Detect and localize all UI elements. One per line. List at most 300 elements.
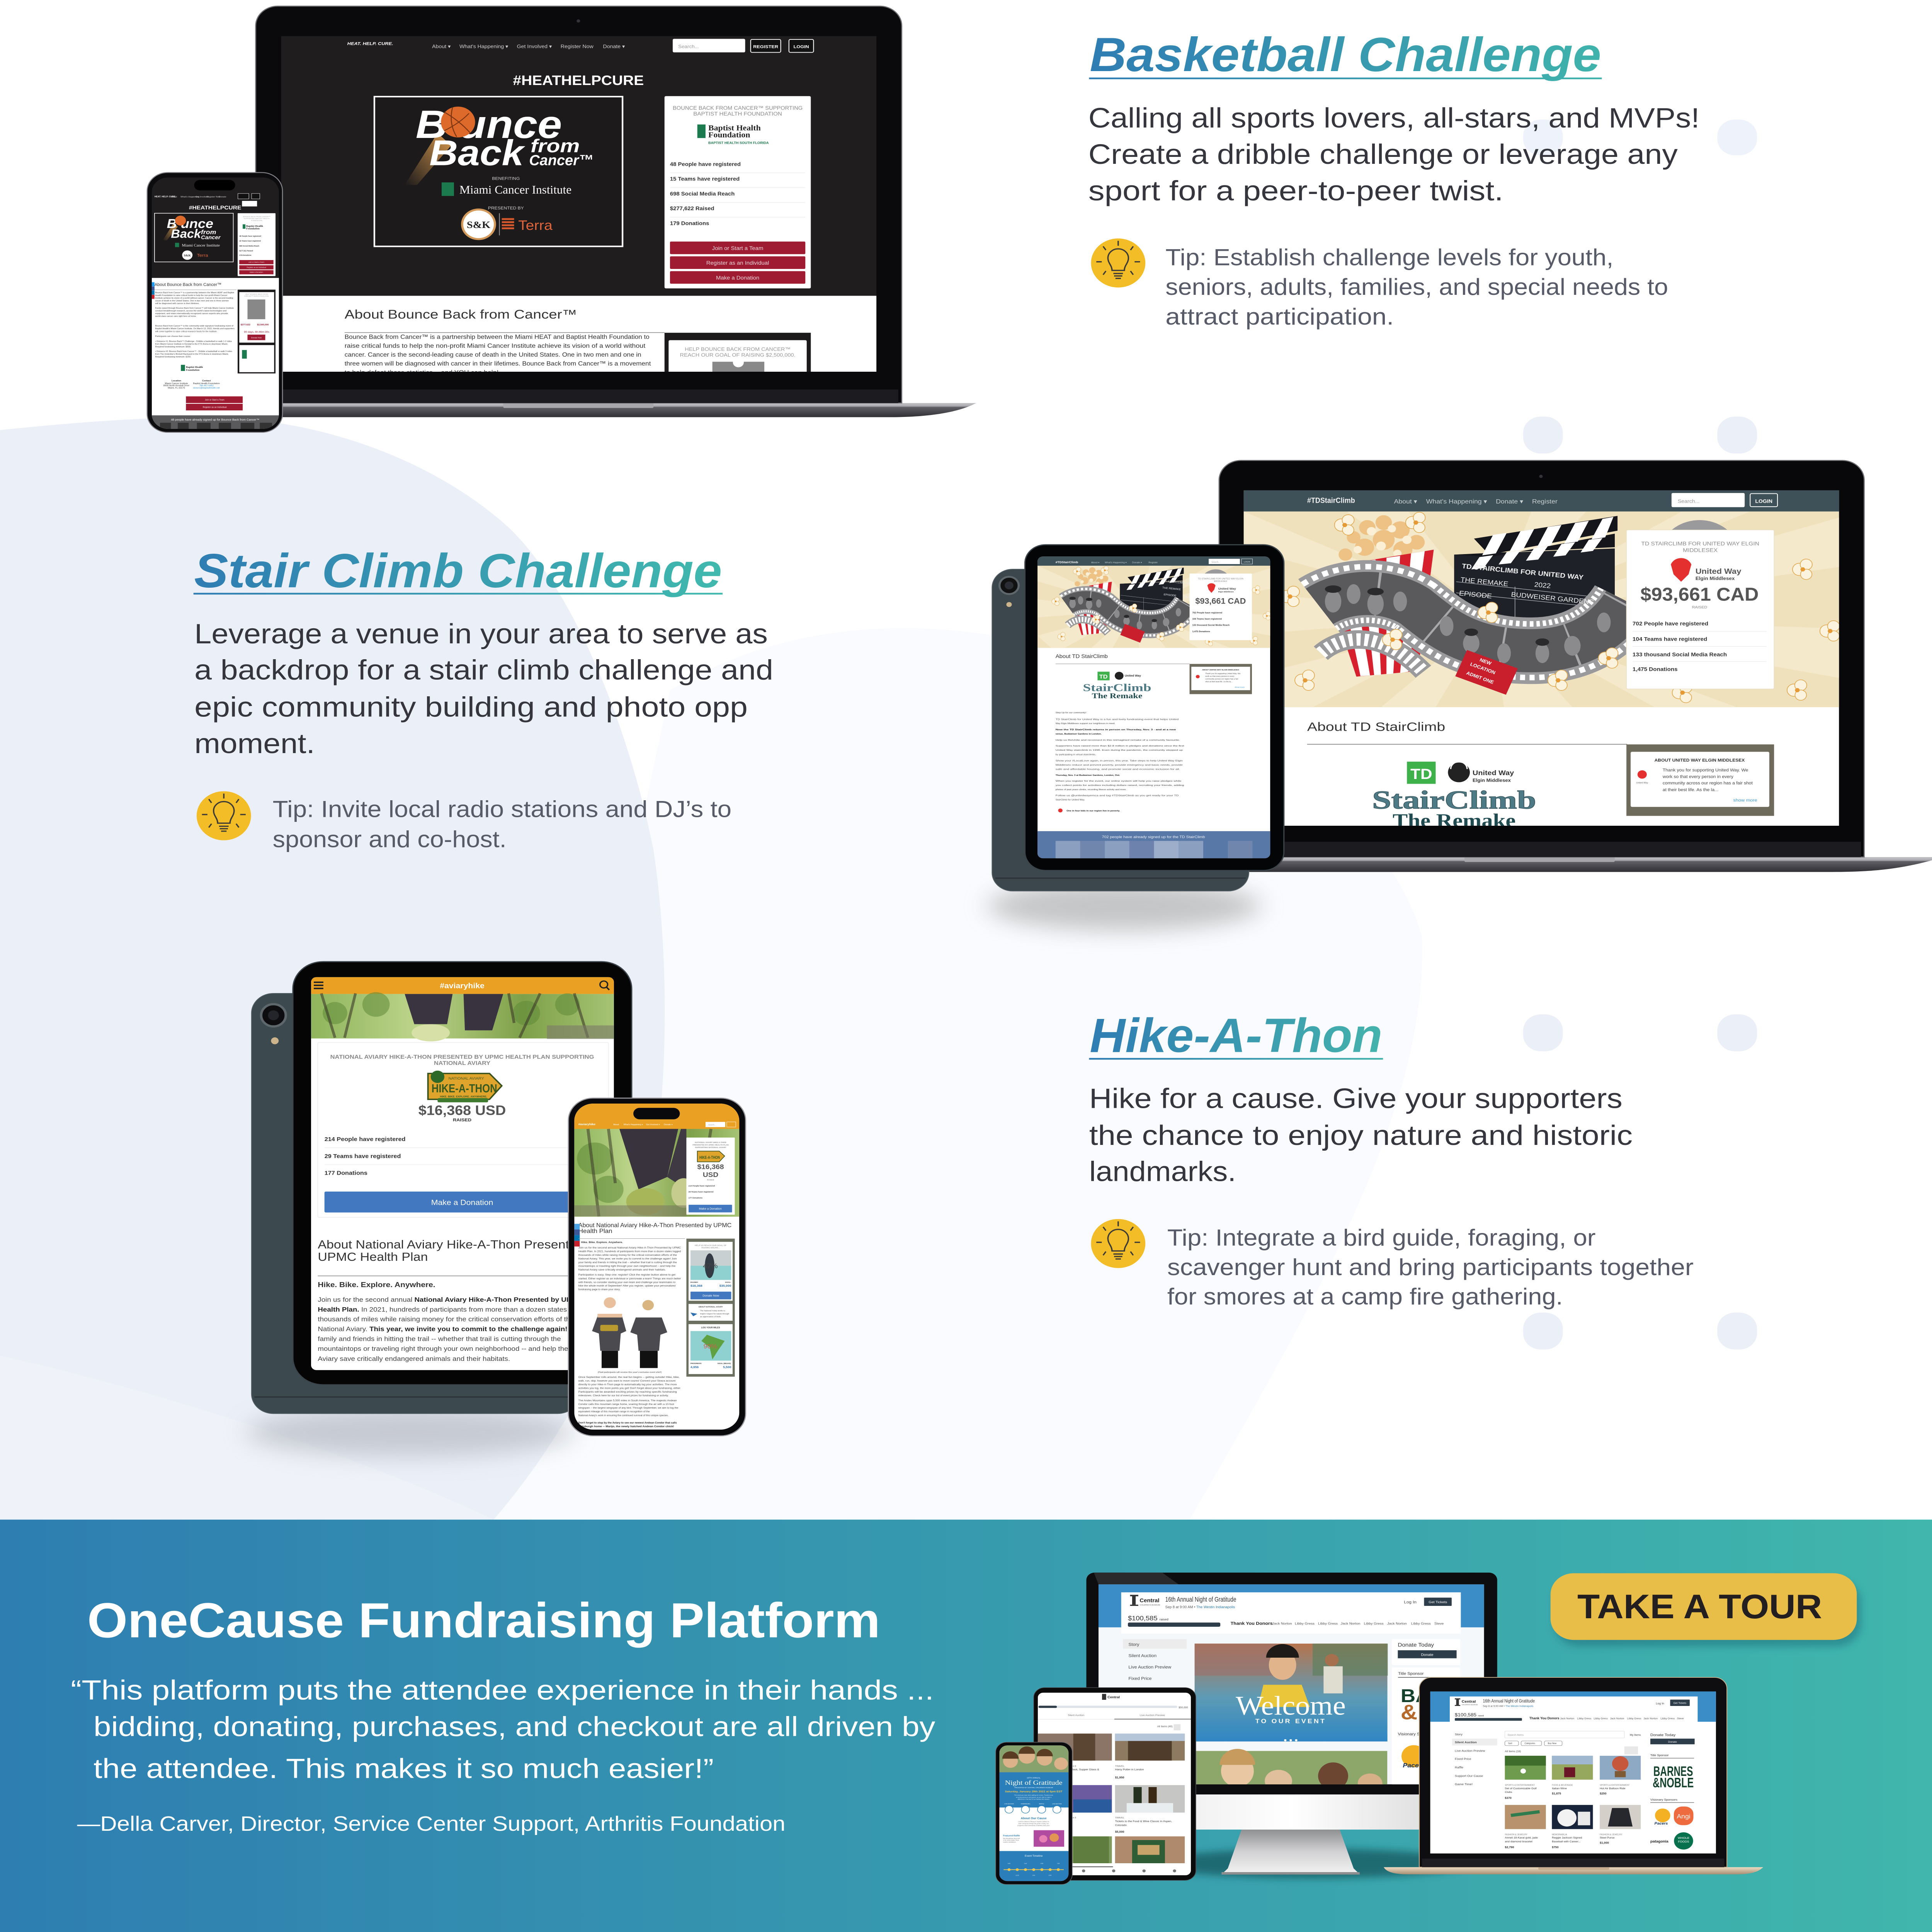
laptop lid (1419, 1677, 1727, 1867)
tablet auction grid: TRAVEL (1115, 1817, 1125, 1819)
laptop screen: $100,585 raised (1455, 1712, 1484, 1718)
phone screen: 3:00 (1032, 1875, 1035, 1876)
site navigation: Register (1532, 498, 1558, 505)
phone screen: from Miami Cancer Institute in Kendall to the FTX Arena in downtown Miami. (155, 343, 228, 345)
bounce back logo panel: PRESENTED BY (488, 206, 524, 211)
donation progress card: 15 Teams have registered (670, 176, 740, 182)
auction item grid: FASHION & JEWELRY (1505, 1834, 1527, 1836)
laptop screen: Libby Gress (1577, 1718, 1592, 1720)
tablet body copy: Supporters have raised more than $2.8 million in pledges and donations since the first (1056, 745, 1184, 747)
phone body copy: Participants will be awarded exciting prizes by reaching specific fundraising (578, 1391, 677, 1393)
auction item grid: SPORTS & ENTERTAINMENT (1600, 1784, 1630, 1787)
phone screen: Join or Start a Team (248, 261, 264, 263)
phone right column: RAISED: (690, 1281, 699, 1283)
phone screen: Miami Cancer Institute (165, 383, 188, 385)
phone screen: Baptist Health Foundation (193, 383, 220, 385)
text block: basketball description: Calling all sports lovers, all-stars, and MVPs! (1088, 102, 1699, 134)
button: take a tour (1551, 1573, 1861, 1646)
about section: Health Plan. In 2021, hundreds of participants from more than a dozen states logged (318, 1306, 591, 1313)
about section: The Remake (1393, 810, 1516, 832)
device mockup: basketball phone (147, 173, 282, 432)
tablet body copy: One in four kids in our region live in poverty. (1066, 810, 1120, 812)
welcome hero photo (1195, 1644, 1388, 1742)
sponsor column: Donate Today (1650, 1733, 1676, 1737)
site navigation: #TDStairClimb (1307, 497, 1355, 505)
tablet screen: 133 thousand Social Media Reach (1192, 624, 1230, 627)
tablet screen: show more (1235, 686, 1245, 689)
tablet auction grid: Colorado (1115, 1824, 1127, 1827)
site navigation: LOGIN (793, 44, 809, 49)
donation progress card: RAISED (1692, 605, 1707, 609)
phone screen: vacation destinations. (1003, 1842, 1016, 1843)
phone right column: 4,956 (690, 1366, 699, 1369)
tablet screen: United Way (1218, 587, 1236, 590)
auction item grid: Reggie Jackson Signed (1552, 1837, 1582, 1839)
bounce back logo panel (374, 97, 622, 247)
tablet screen: Register (1148, 562, 1158, 564)
phone screen: Get Involved (196, 196, 209, 198)
tablet body copy: Way Elgin Middlesex support our neighbours in need. (1056, 722, 1116, 725)
phone screen: Back (171, 227, 202, 241)
testimonial quote: the attendee. This makes it so much easier!” (94, 1753, 714, 1784)
about section: About National Aviary Hike-A-Thon Presented by (318, 1238, 602, 1251)
phone screen: HIKE-A-THON (699, 1155, 720, 1160)
tablet body copy: Now the TD StairClimb returns in person on Thursday, Nov. 3 - and at a new (1056, 728, 1176, 731)
tablet body copy (1056, 711, 1184, 812)
phone screen: Register as an Individual (247, 267, 266, 268)
about section: work so that every person in every (1662, 775, 1733, 779)
panel: basketball challenge copy (1088, 27, 1699, 330)
tablet auction grid: Lot 8 (1071, 1765, 1076, 1767)
auction item grid: FOOD & BEVERAGE (1552, 1784, 1573, 1787)
phone right column (686, 1239, 735, 1377)
red ticket text: NEW (1479, 657, 1493, 666)
donation progress card: 48 People have registered (670, 161, 741, 167)
phone screen: Baptist Health (186, 366, 203, 369)
text block: stair climb description: moment. (194, 728, 315, 759)
phone screen: S&K (184, 254, 191, 257)
phone body copy: Participation is easy. Step one: register! Click the register button above to get (578, 1274, 675, 1276)
tablet body copy: photos of past years climbs, recording fitness activity and more. (1056, 788, 1127, 791)
tablet screen: $50,000 (1179, 1706, 1188, 1709)
sponsor column: Title Sponsor (1650, 1754, 1669, 1757)
auction item grid: and diamond bracelet (1505, 1840, 1532, 1843)
phone screen: NATIONAL AVIARY HIKE-A-THON (695, 1141, 726, 1144)
donation progress card (318, 1043, 609, 1218)
laptop screen: Log In (1656, 1702, 1664, 1705)
phone screen: cause of death in the United States. One in two men and one in three women (155, 300, 229, 302)
text block: hike description: landmarks. (1089, 1156, 1236, 1187)
tablet body copy: TD StairClimb for United Way is a fun and lively fundraising event that helps United (1056, 718, 1179, 721)
tablet screen: shot at their best life. As the la... (1205, 681, 1232, 683)
about section (345, 308, 811, 376)
phone screen: 214 People have registered (689, 1185, 715, 1187)
auction item grid: $1,000 (1600, 1841, 1609, 1845)
phone right column: $16,368 (690, 1284, 702, 1287)
sponsor column: &NOBLE (1653, 1775, 1694, 1790)
phone screen: B unce (167, 217, 213, 231)
tablet screen: The Remake (1092, 692, 1143, 700)
phone screen: What's Happening (180, 196, 199, 198)
device mockup: black tablet (1034, 1688, 1196, 1880)
phone screen: programs reach thousands of families each year. (1017, 1825, 1050, 1827)
phone screen: Participants can choose their course: (155, 335, 190, 338)
phone screen: will be diagnosed with cancer in their lifetimes. (155, 303, 199, 305)
phone body copy: Health Plan. In 2021, hundreds of participants from more than a dozen states logged (578, 1250, 681, 1253)
laptop screen: CHILDREN'S MUSEUM (1462, 1704, 1478, 1706)
monitor screen: Story (1128, 1643, 1139, 1647)
phone screen: Baptist Health (246, 225, 263, 228)
monitor screen: Get Tickets (1429, 1600, 1447, 1604)
auction item grid: Anneli 18-Karat gold, jade (1505, 1837, 1538, 1839)
tablet body copy: venue, Budweiser Gardens in London. (1056, 733, 1102, 735)
tablet screen (1037, 556, 1270, 859)
laptop screen: Libby Gress (1594, 1718, 1608, 1720)
phone screen: HELP BOUNCE BACK FROM (245, 293, 268, 295)
about section: at their best life. As the la... (1663, 788, 1718, 793)
device mockup: basketball laptop (205, 6, 976, 417)
phone body copy: hike the whole month of September! After you register, update your personalized (578, 1285, 676, 1287)
about section: Thank you for supporting United Way. We (1663, 768, 1748, 773)
phone screen: HEAT. HELP. CURE. (155, 196, 176, 198)
text block: basketball description (1088, 102, 1699, 207)
text block: stair climb description: Leverage a venue in your area to serve as (194, 619, 768, 650)
phone body copy: milestones. Check here for our list of event prizes for fundraising or activity. (578, 1395, 669, 1397)
monitor screen: Libby Gress (1411, 1622, 1431, 1625)
site navigation: About ▾ (432, 44, 451, 49)
phone screen: 6:00 (1049, 1875, 1051, 1876)
bounce back logo panel: Miami Cancer Institute (459, 183, 571, 196)
phone screen: Register as an Individual (203, 406, 226, 409)
site navigation: About ▾ (1394, 498, 1417, 505)
laptop screen: Jack Norton (1643, 1718, 1658, 1720)
phone screen: Bounce Back from Cancer™ is the community-wide signature fundraising event of (155, 325, 233, 327)
site navigation: REGISTER (753, 44, 778, 49)
device mockup: stair climb laptop (1176, 461, 1932, 872)
testimonial attribution: —Della Carver, Director, Service Center Support, Arthritis Foundation (77, 1812, 786, 1835)
phone screen: FUNDRAISING (1021, 1803, 1030, 1805)
welcome hero photo: Welcome (1236, 1691, 1346, 1721)
phone body copy: (Paid participants will receive this year's exclusive event shirt!) (598, 1371, 662, 1374)
heading: Stair Climb Challenge: Stair Climb Challenge (194, 544, 722, 597)
tablet screen: TD STAIRCLIMB FOR UNITED WAY ELGIN (1198, 578, 1243, 580)
tablet body copy: you collect points for activities including dollars raised, recruiting your friends, adding (1056, 784, 1184, 787)
phone screen: 9:00 (1008, 1863, 1010, 1864)
monitor screen: Steve (1434, 1622, 1444, 1625)
tablet body copy: Middlesex reduce and prevent poverty, provide emergency and basic needs, provide (1056, 764, 1183, 766)
phone screen: 16TH ANNUAL (1027, 1777, 1041, 1779)
tablet screen: TD (1099, 674, 1107, 680)
bounce back logo panel: from (531, 136, 580, 156)
laptop screen: Steve (1677, 1718, 1684, 1720)
monitor frame (1086, 1573, 1497, 1794)
donation progress card: 214 People have registered (325, 1136, 405, 1143)
device mockup: gold laptop (1384, 1677, 1763, 1874)
monitor screen: Jack Norton (1387, 1622, 1407, 1625)
about section: Join us for the second annual National Aviary Hike-A-Thon Presented by UPMC (318, 1296, 583, 1303)
donation progress card: Make a Donation (716, 275, 759, 281)
monitor screen: Log In (1404, 1600, 1417, 1604)
site navigation: Search... (678, 44, 699, 49)
phone screen: $16,368 (697, 1163, 724, 1170)
tablet screen: community across our region has a fair (1205, 678, 1238, 680)
about section: TD (1410, 765, 1432, 782)
sponsor column: WHOLE (1678, 1836, 1689, 1840)
laptop screen: Story (1455, 1733, 1463, 1736)
laptop screen: My Items (1630, 1734, 1641, 1736)
phone right column: GOAL (MILES): (718, 1362, 731, 1364)
auction item grid: Clubs (1505, 1791, 1512, 1794)
laptop screen: TD StairClimb page (1244, 490, 1840, 832)
tablet body copy: Follow us @unitedwayemca and tag #TDStairClimb as you get ready for your TD (1056, 794, 1179, 797)
phone body copy: National Aviary's work in ensuring the continued survival of this unique species. (578, 1414, 669, 1417)
laptop screen: Fixed Price (1455, 1757, 1471, 1761)
phone screen: Register Now (206, 196, 221, 198)
tablet screen: LOGIN (1244, 561, 1250, 563)
phone screen: Health Plan (578, 1228, 612, 1235)
laptop screen: Buy Now (1548, 1742, 1556, 1745)
phone screen: Foundation (186, 369, 199, 371)
phone screen (574, 1104, 739, 1430)
laptop screen: Categories (1525, 1742, 1535, 1745)
text block: hike description: Hike for a cause. Give your supporters (1089, 1083, 1622, 1114)
phone right column: ABOUT NATIONAL AVIARY (698, 1306, 723, 1308)
donation progress card: United Way (1696, 567, 1742, 576)
monitor screen: Visionary Sponsors (1398, 1732, 1435, 1736)
donation progress card: 1,475 Donations (1633, 667, 1678, 673)
donation progress card: Join or Start a Team (712, 245, 763, 251)
about section: About Bounce Back from Cancer™ (345, 308, 577, 321)
monitor screen: Donate Today (1398, 1642, 1434, 1648)
heading: Basketball Challenge: Basketball Challenge (1090, 27, 1601, 82)
text block: hike description (1089, 1083, 1633, 1187)
tablet screen: Thank you for supporting United Way. We (1205, 673, 1241, 675)
tablet screen: Donate ▾ (1132, 562, 1142, 564)
about section: family and friends in hitting the trail -- whether that trail is cutting through the (318, 1335, 561, 1342)
tablet screen: 702 people have already signed up for the TD StairClimb (1102, 835, 1205, 839)
laptop screen: Libby Gress (1627, 1718, 1641, 1720)
laptop screen: Sort (1508, 1742, 1512, 1745)
about section: ABOUT UNITED WAY ELGIN MIDDLESEX (1655, 759, 1745, 763)
donation progress card: 104 Teams have registered (1633, 636, 1707, 642)
tablet screen: About TD StairClimb (1056, 653, 1108, 659)
tablet screen: work so that every person in every (1205, 675, 1235, 677)
monitor screen: Jack Norton (1341, 1622, 1360, 1625)
bounce back logo panel: Cancer™ (529, 151, 594, 168)
about section: United Way (1636, 782, 1648, 784)
phone screen: Search... (708, 1124, 716, 1126)
phone body copy: directly to your Hike-A-Thon page to automatically log your activities. The more (578, 1383, 677, 1386)
phone screen: Donate Now (251, 337, 262, 338)
phone screen: 29 Teams have registered (689, 1191, 713, 1193)
phone body copy: equivalent mileage of this mountain range in recognition of the (578, 1410, 650, 1413)
sponsor column: Angi (1677, 1813, 1690, 1820)
laptop screen: Live Auction Preview (1455, 1749, 1485, 1753)
phone screen: • Distance #1: Bounce Back™ Challenge - Dribble a basketball or walk 1-2 miles (155, 340, 232, 343)
tablet body copy: Step Up for our community! (1056, 711, 1087, 714)
monitor screen: Jack Norton (1272, 1622, 1292, 1625)
phone screen: PRESENTED BY CENTRAL CHILDREN'S MUSEUM (1014, 1787, 1053, 1788)
laptop screen: Search Items (1508, 1734, 1524, 1736)
monitor screen: Title Sponsor (1398, 1672, 1424, 1676)
rear tablet (992, 569, 1249, 891)
phone screen: learn and grow through the power of play. Our (1019, 1823, 1049, 1825)
about section: REACH OUR GOAL OF RAISING $2,500,000. (680, 352, 796, 358)
phone screen: • Distance #2: Bounce Back from Cancer™ - Dribble a basketball or walk 3 miles (155, 350, 232, 353)
icon: tip lightbulb (197, 791, 251, 840)
phone screen: Central Children's Museum inspires children to (1018, 1821, 1049, 1822)
tablet auction grid: $5,000 (1115, 1830, 1124, 1833)
clapper text: THE REMAKE (1460, 576, 1509, 588)
phone screen: 179 Donations (239, 254, 252, 256)
monitor screen: Thank You Donors (1231, 1621, 1273, 1626)
phone body copy: your family and friends in hitting the trail -- whether that trail is cutting through the (578, 1261, 677, 1264)
auction item grid: $250 (1600, 1792, 1606, 1795)
site navigation: Register Now (561, 44, 594, 49)
monitor screen: Libby Gress (1318, 1622, 1338, 1625)
device mockup: hike tablet (246, 962, 632, 1457)
about section: raise critical funds to help the non-profit Miami Cancer Institute achieve its vision of a world without (345, 342, 646, 349)
welcome hero photo: TO OUR EVENT (1255, 1718, 1326, 1725)
phone screen: Hike. Bike. Explore. Anywhere. (581, 1241, 623, 1244)
site navigation: Donate ▾ (1496, 498, 1524, 505)
donation progress card: Register as an Individual (706, 260, 769, 266)
text block: hike tip: scavenger hunt and bring participants together (1167, 1254, 1694, 1280)
phone right column: HELP US REACH OUR GOAL OF (695, 1245, 726, 1247)
phone screen: RAFFLE (1039, 1803, 1044, 1805)
phone right column: Donate Now (702, 1294, 719, 1297)
laptop screen: All Items (18) (1505, 1750, 1521, 1753)
phone screen: 7:00 (1057, 1863, 1060, 1864)
phone screen: Join or Start a Team (205, 399, 224, 401)
monitor screen: Libby Gress (1364, 1622, 1384, 1625)
phone screen: 177 Donations (689, 1197, 702, 1199)
auction item grid: $2,790 (1505, 1845, 1514, 1849)
auction item grid: Set of Customizable Golf (1505, 1787, 1537, 1790)
phone body copy: with friends, so consider starting your own team and challenge your teammates to (578, 1281, 676, 1284)
bounce back logo panel: Back (429, 133, 526, 173)
donation progress card: 133 thousand Social Media Reach (1633, 652, 1727, 658)
text block: basketball tip: attract participation. (1165, 303, 1394, 330)
phone body copy: The Andes Mountains span 5,500 miles in South America. The majestic Andean (578, 1400, 677, 1402)
phone screen: $2,500,000 (257, 324, 269, 326)
phone body copy: Pittsburgh home -- Marijo, the newly hatched Andean Condor chick! (578, 1425, 674, 1428)
phone body copy: thousands of miles while raising money for the critical conservation efforts of the (578, 1254, 677, 1257)
site navigation (347, 39, 813, 53)
text block: stair climb tip: sponsor and co-host. (273, 826, 507, 852)
phone right column: 90% (704, 1343, 717, 1350)
phone screen: Terra (197, 253, 208, 258)
phone screen: will come together to raise critical research funds for the Institute. (155, 330, 217, 333)
phone body copy: National Aviary. This year, we invite you to commit to the challenge again! Join (578, 1258, 677, 1260)
text block: stair climb description: a backdrop for a stair climb challenge and (194, 655, 773, 686)
tablet screen: Silent Auction (1068, 1714, 1085, 1717)
testimonial quote: “This platform puts the attendee experience in their hands ... (71, 1675, 934, 1706)
icon: tip lightbulb (1091, 1219, 1145, 1268)
laptop screen: Jack Norton (1610, 1718, 1624, 1720)
laptop screen: Raffle (1455, 1766, 1464, 1769)
icon: tip lightbulb (1091, 238, 1145, 287)
donation progress card: $16,368 USD (418, 1102, 506, 1118)
text block: stair climb tip (273, 796, 731, 852)
phone screen: Featured Raffle (1003, 1835, 1020, 1837)
phone screen: What's Happening ▾ (624, 1124, 643, 1126)
phone screen: Required fundraising minimum: $150. (155, 356, 191, 358)
testimonial quote: bidding, donating, purchases, and checkout are all driven by (94, 1711, 935, 1742)
tablet screen: Live Auction Preview (1140, 1714, 1165, 1717)
phone screen: from The Underline's Brickell Backyard to the FTX Arena in downtown Miami. (155, 353, 229, 355)
monitor screen: $100,585 raised (1128, 1615, 1168, 1622)
tablet body copy: Help us ReUnite and reconnect in this reimagined remake of a community favourite. (1056, 739, 1180, 742)
tablet screen: TD STAIRCLIMB FOR UNITED WAY (1163, 580, 1210, 587)
sponsor column (1650, 1733, 1695, 1850)
tablet auction grid: Mask, Supper Glass & (1071, 1769, 1099, 1771)
phone screen: About (171, 196, 177, 198)
phone body copy: Condor calls this mountain range home, soaring through the air with a 10-foot (578, 1403, 674, 1406)
tablet screen: What's Happening ▾ (1105, 562, 1127, 564)
about section: mountaintops or traveling right through your own neighborhood -- and help the National (318, 1345, 597, 1352)
text block: hike description: the chance to enjoy nature and historic (1089, 1120, 1633, 1151)
laptop screen: Game Time! (1455, 1782, 1473, 1786)
laptop screen: Support Our Cause (1455, 1774, 1483, 1777)
phone screen: amazing sponsors and guests, we are able to make a (1016, 1796, 1052, 1798)
phone screen: Required fundraising minimum: $500. (155, 346, 191, 348)
bounce back logo panel: BENEFITING (492, 177, 520, 181)
testimonial quote (71, 1675, 935, 1784)
laptop screen: Thank You Donors (1529, 1716, 1560, 1720)
about section: community across our region has a fair shot (1663, 781, 1753, 786)
donation progress card: Make a Donation (431, 1199, 493, 1207)
sponsor column: Visionary Sponsors (1650, 1798, 1677, 1801)
phone right column: $35,000 (719, 1284, 731, 1287)
tablet screen: BUDWEISER GARDENS (1184, 596, 1216, 602)
about section (318, 1238, 605, 1362)
clapper text: 2022 (1534, 581, 1551, 590)
rear tablet (252, 993, 580, 1413)
laptop lid (1219, 461, 1864, 857)
donation progress card: 702 People have registered (1633, 621, 1708, 627)
phone screen: Location (172, 380, 182, 382)
phone screen: 1:00 (1024, 1863, 1027, 1864)
clapper text: EPISODE (1459, 590, 1492, 600)
text block: basketball tip: seniors, adults, families, and special needs to (1165, 274, 1668, 300)
phone screen: $277,622 (241, 324, 250, 326)
tablet screen: Central (1107, 1696, 1120, 1699)
orange top bar: #aviaryhike (440, 982, 485, 990)
phone screen (999, 1745, 1068, 1881)
text block: hike tip: for smores at a camp fire gathering. (1167, 1283, 1563, 1310)
phone screen: $277,622 Raised (239, 250, 253, 252)
about section: Elgin Middlesex (1473, 778, 1511, 783)
tablet body (1034, 1688, 1196, 1880)
device mockup: imac monitor (1086, 1573, 1497, 1874)
auction item grid: Italian Wine (1552, 1787, 1567, 1790)
phone screen: 786-467-5462 (199, 385, 214, 387)
donation progress card: NATIONAL AVIARY HIKE-A-THON PRESENTED BY UPMC HEALTH PLAN SUPPORTING (330, 1054, 594, 1060)
phone screen: Event Timeline (1025, 1855, 1043, 1857)
phone screen: #aviaryhike (578, 1122, 596, 1126)
phone body (147, 173, 282, 432)
about section: three women will be diagnosed with cancer in their lifetimes. Bounce Back from Cancer™ is a movement (345, 360, 651, 367)
phone right column: 47% (703, 1262, 718, 1270)
tablet screen: ABOUT UNITED WAY ELGIN MIDDLESEX (1202, 669, 1240, 671)
phone screen: Saturday, January 29th 2022 at 6pm EST (1005, 1791, 1063, 1793)
phone screen: 48 People have registered (239, 235, 261, 237)
text block: hike tip: Tip: Integrate a bird guide, foraging, or (1167, 1225, 1596, 1251)
event t-shirt photo (592, 1297, 667, 1368)
phone screen: 48 people have already signed up for Bounce Back from Cancer™ (171, 418, 259, 421)
kids photo (1196, 1749, 1387, 1793)
